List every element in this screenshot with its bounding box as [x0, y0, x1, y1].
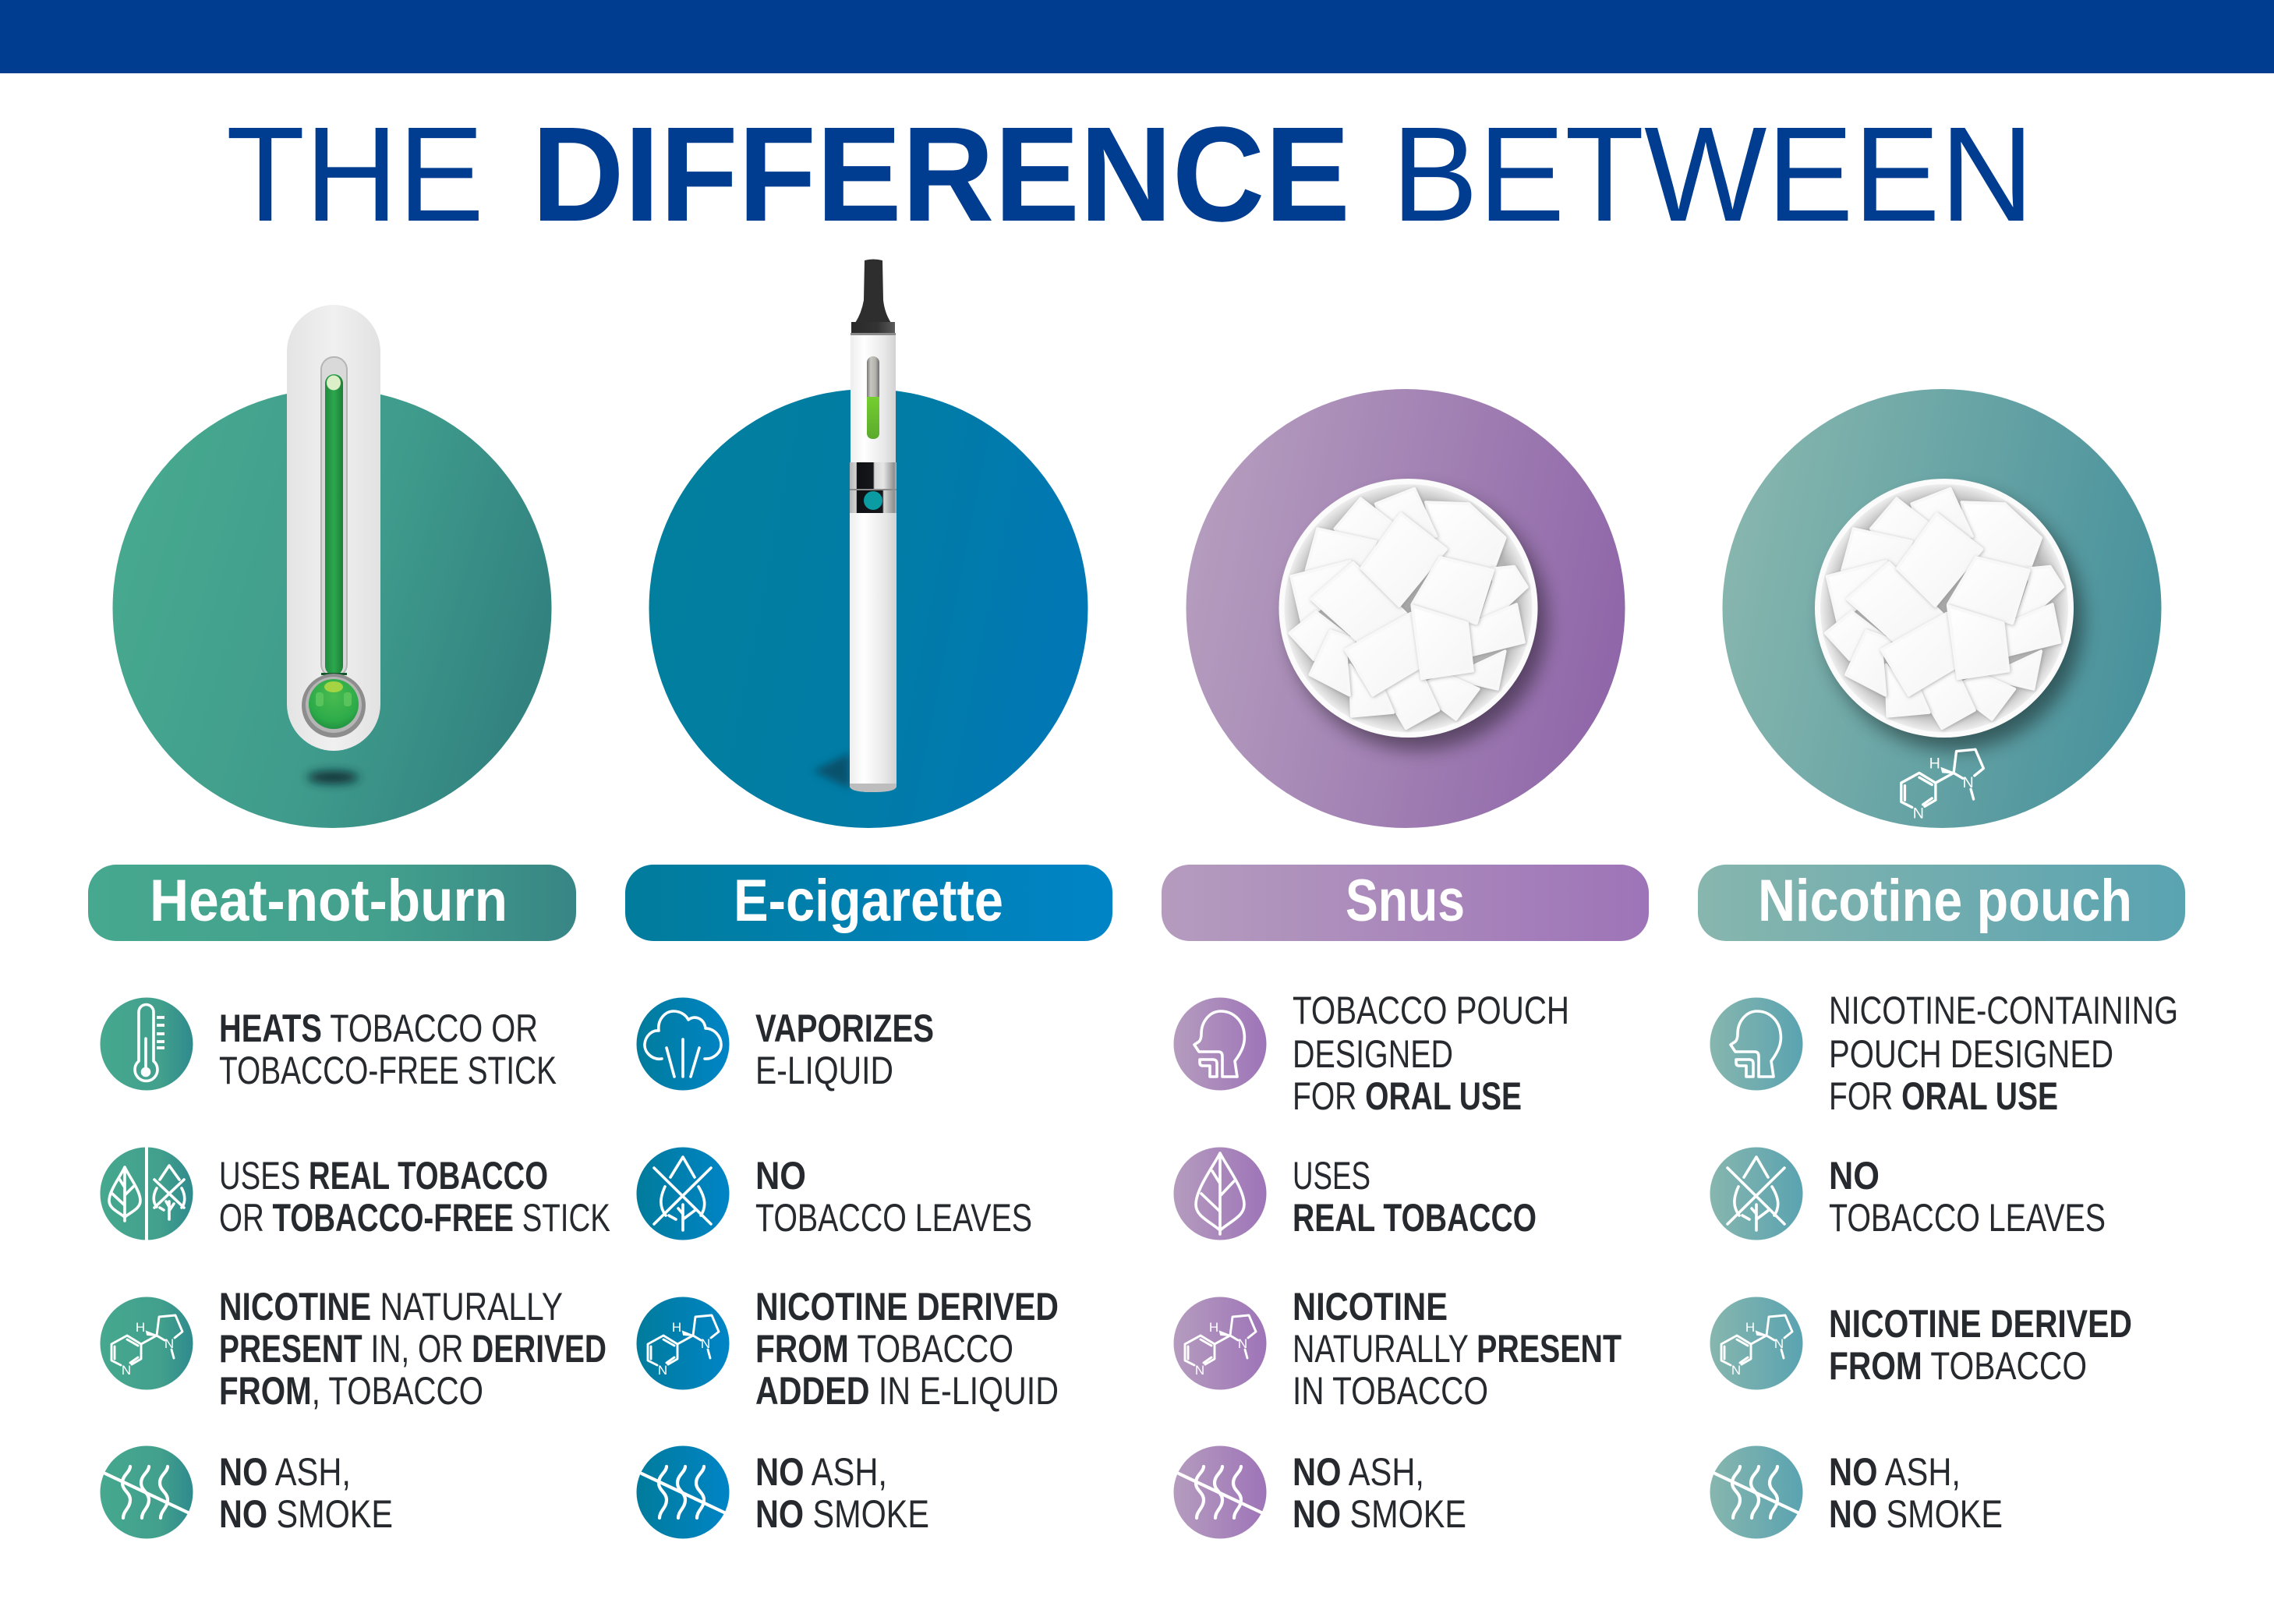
- text: nicotine derived: FROM TOBACCO: [755, 1327, 1013, 1371]
- text: heats tobacco: HEATS TOBACCO OR: [219, 1007, 538, 1050]
- text: nicotine derived: ADDED IN E-LIQUID: [755, 1369, 1059, 1413]
- text: no ash no smoke: NO ASH,: [219, 1450, 351, 1494]
- icon: nicotine molecule: [636, 1297, 730, 1389]
- icon: leaf: [1174, 1148, 1266, 1240]
- text: uses real tobacco: REAL TOBACCO: [1293, 1196, 1537, 1240]
- heading pill: e-cigarette: E-cigarette: [734, 868, 1003, 934]
- text: tobacco pouch: DESIGNED: [1293, 1032, 1453, 1076]
- icon: leaf and no leaf: [100, 1147, 193, 1240]
- icon: vapor cloud: [636, 998, 730, 1090]
- text: vaporizes: [755, 1007, 934, 1092]
- snus circle: [1187, 389, 1625, 828]
- text: vaporizes: VAPORIZES: [755, 1007, 934, 1050]
- text: nicotine-containing pouch: POUCH DESIGNED: [1829, 1032, 2113, 1076]
- text: nicotine derived: NICOTINE DERIVED: [755, 1285, 1059, 1329]
- column: snus facts: [1174, 989, 1622, 1539]
- panel: heat-not-burn: [112, 305, 552, 828]
- text: uses real tobacco: [219, 1154, 610, 1240]
- icon: thermometer device: [287, 305, 380, 751]
- text: heats tobacco: TOBACCO-FREE STICK: [219, 1049, 557, 1092]
- text: nicotine derived: FROM TOBACCO: [1829, 1344, 2087, 1388]
- icon: nicotine molecule: [1174, 1297, 1266, 1389]
- icon: head: [1174, 998, 1266, 1090]
- panel: nicotine pouch: [1723, 389, 2161, 828]
- e-cigarette shadow: [813, 753, 850, 788]
- text: nicotine naturally present: NICOTINE: [1293, 1285, 1448, 1329]
- icon: nicotine molecule: [1901, 749, 1983, 822]
- text: uses real tobacco: OR TOBACCO-FREE STICK: [219, 1196, 610, 1240]
- text: no ash no smoke: NO SMOKE: [1293, 1492, 1466, 1536]
- text: uses real tobacco: [1293, 1154, 1537, 1240]
- icon: nicotine molecule: [100, 1297, 193, 1389]
- shadow under thermometer: [307, 771, 359, 784]
- text: no tobacco leaves: TOBACCO LEAVES: [755, 1196, 1032, 1240]
- heat-not-burn circle: [112, 389, 552, 828]
- icon: head: [1710, 998, 1802, 1090]
- text: no tobacco leaves: TOBACCO LEAVES: [1829, 1196, 2106, 1240]
- icon: thermometer: [100, 998, 193, 1090]
- text: no ash no smoke: [219, 1450, 393, 1536]
- title: [226, 98, 2034, 249]
- text: nicotine naturally present: IN TOBACCO: [1293, 1369, 1488, 1413]
- e-cigarette circle: [649, 389, 1088, 828]
- title: THE: [226, 98, 484, 249]
- icon: e-cigarette device: [850, 259, 897, 792]
- icon: no smoke: [1710, 1445, 1802, 1539]
- text: tobacco pouch: [1293, 989, 1569, 1118]
- icon: no leaf: [1710, 1148, 1802, 1240]
- icon: no leaf: [636, 1148, 730, 1240]
- text: nicotine naturally present: [1293, 1285, 1622, 1413]
- text: no ash no smoke: NO SMOKE: [1829, 1492, 2003, 1536]
- text: no ash no smoke: NO ASH,: [755, 1450, 887, 1494]
- text: nicotine: FROM, TOBACCO: [219, 1369, 483, 1413]
- text: nicotine: [219, 1285, 607, 1413]
- icon: no smoke: [100, 1445, 193, 1539]
- heading pill: heat-not-burn: Heat-not-burn: [150, 868, 507, 934]
- text: heats tobacco: [219, 1007, 557, 1092]
- text: no tobacco leaves: NO: [755, 1154, 806, 1198]
- text: nicotine derived: [1829, 1302, 2132, 1388]
- column: heat-not-burn facts: [100, 998, 610, 1539]
- text: no tobacco leaves: [1829, 1154, 2106, 1240]
- icon: no smoke: [636, 1445, 730, 1539]
- text: no ash no smoke: [755, 1450, 929, 1536]
- image: nicotine pouch bowl: [1815, 479, 2083, 750]
- top band: [0, 0, 2274, 73]
- text: nicotine-containing pouch: [1829, 989, 2178, 1118]
- column: nicotine pouch facts: [1710, 989, 2178, 1539]
- icon: no smoke: [1174, 1445, 1266, 1539]
- heading pill: snus: Snus: [1346, 868, 1465, 934]
- text: no ash no smoke: [1829, 1450, 2003, 1536]
- text: no ash no smoke: [1293, 1450, 1466, 1536]
- text: uses real tobacco: USES: [1293, 1154, 1370, 1198]
- text: nicotine derived: [755, 1285, 1059, 1413]
- text: no ash no smoke: NO SMOKE: [219, 1492, 393, 1536]
- title: DIFFERENCE: [532, 98, 1350, 249]
- text: no ash no smoke: NO ASH,: [1293, 1450, 1424, 1494]
- text: uses real tobacco: USES REAL TOBACCO: [219, 1154, 548, 1198]
- text: nicotine derived: NICOTINE DERIVED: [1829, 1302, 2132, 1346]
- text: nicotine-containing pouch: NICOTINE-CONTAINING: [1829, 989, 2178, 1032]
- icon: nicotine molecule: [1710, 1297, 1802, 1389]
- text: no ash no smoke: NO ASH,: [1829, 1450, 1961, 1494]
- text: nicotine: PRESENT IN, OR DERIVED: [219, 1327, 607, 1371]
- text: nicotine-containing pouch: FOR ORAL USE: [1829, 1074, 2058, 1118]
- text: tobacco pouch: TOBACCO POUCH: [1293, 989, 1569, 1032]
- text: tobacco pouch: FOR ORAL USE: [1293, 1074, 1522, 1118]
- text: nicotine naturally present: NATURALLY PRESENT: [1293, 1327, 1622, 1371]
- panel: e-cigarette: [649, 259, 1088, 828]
- heading pill: heat-not-burn: [88, 865, 576, 941]
- text: no tobacco leaves: NO: [1829, 1154, 1880, 1198]
- column: e-cigarette facts: [636, 998, 1059, 1539]
- heading pill: snus: [1162, 865, 1649, 941]
- text: no tobacco leaves: [755, 1154, 1032, 1240]
- text: no ash no smoke: NO SMOKE: [755, 1492, 929, 1536]
- title: BETWEEN: [1392, 98, 2034, 249]
- heading pill: nicotine pouch: Nicotine pouch: [1758, 868, 2132, 934]
- text: nicotine: NICOTINE NATURALLY: [219, 1285, 563, 1329]
- text: vaporizes: E-LIQUID: [755, 1049, 893, 1092]
- heading pill: e-cigarette: [625, 865, 1112, 941]
- panel: snus: [1187, 389, 1625, 828]
- image: snus pouch bowl: [1278, 479, 1547, 750]
- nicotine pouch circle: [1723, 389, 2161, 828]
